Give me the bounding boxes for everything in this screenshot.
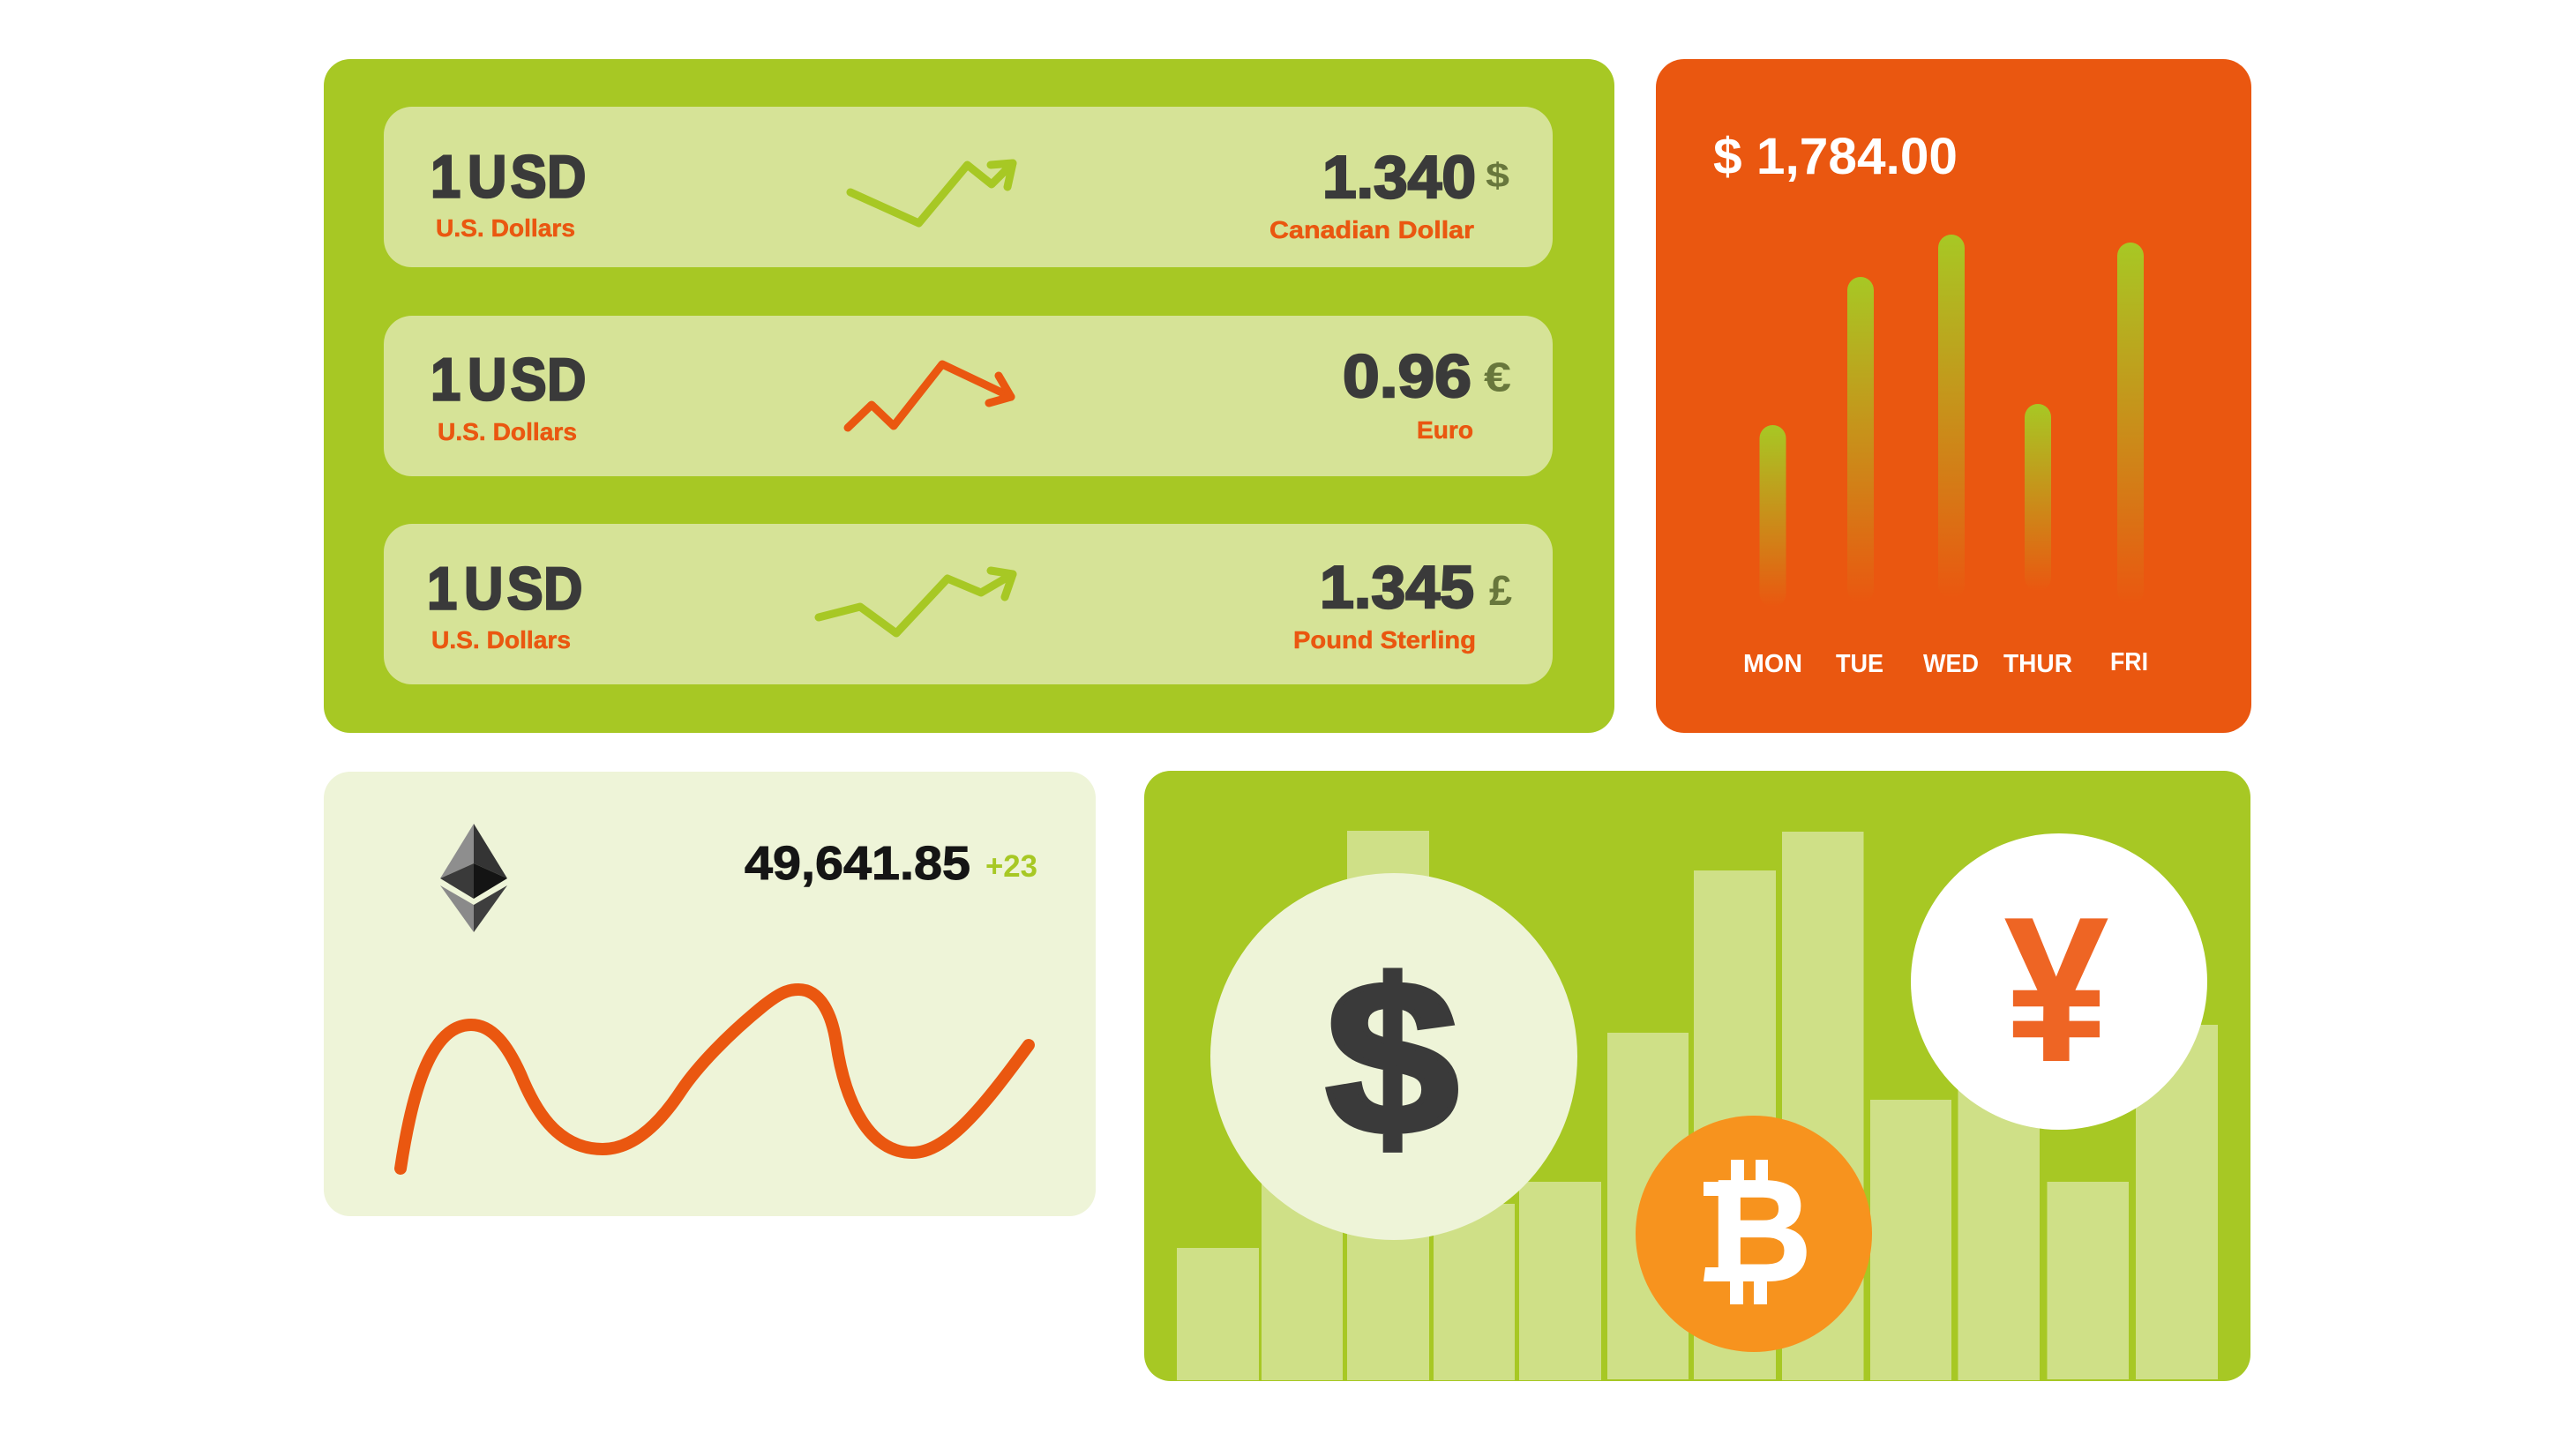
price change: +23 <box>985 849 1037 884</box>
row: USD to Euro: 1 USD <box>431 345 586 413</box>
row: USD to Canadian Dollar: U.S. Dollars <box>436 214 575 242</box>
row: USD to Canadian Dollar <box>384 107 1553 267</box>
icon: rising trend arrow <box>850 163 1013 223</box>
panel: exchange rates <box>324 59 1614 733</box>
row: USD to Euro: U.S. Dollars <box>438 418 577 445</box>
bar chart: weekdays <box>1759 235 2144 607</box>
axis labels: weekdays <box>1743 648 2148 678</box>
icon: dollar coin <box>1210 873 1577 1240</box>
row: USD to Euro <box>384 316 1553 476</box>
row: USD to Euro: 0.96 <box>1343 342 1471 410</box>
icon: falling trend arrow <box>848 364 1011 428</box>
icon: yen coin <box>1911 833 2207 1130</box>
row: USD to Pound Sterling: U.S. Dollars <box>431 626 571 654</box>
icon: bitcoin coin: B <box>1710 1150 1812 1311</box>
row: USD to Pound Sterling: £ <box>1489 568 1512 615</box>
background bar chart <box>1177 831 2218 1380</box>
panel: currencies <box>1144 771 2250 1381</box>
axis labels: weekdays: FRI <box>2110 648 2148 676</box>
row: USD to Euro: € <box>1484 355 1511 400</box>
row: USD to Pound Sterling: 1 USD <box>427 554 582 622</box>
axis labels: weekdays: WED <box>1923 650 1979 678</box>
heading: total amount: $ 1,784.00 <box>1713 128 1958 185</box>
icon: ethereum logo <box>440 824 507 932</box>
panel: ethereum price <box>324 772 1096 1216</box>
icon: yen coin: ¥ <box>2005 876 2108 1104</box>
row: USD to Pound Sterling: 1.345 <box>1320 554 1474 621</box>
row: USD to Canadian Dollar: 1 USD <box>431 142 586 210</box>
row: USD to Pound Sterling <box>384 524 1553 684</box>
row: USD to Canadian Dollar: $ <box>1486 157 1509 195</box>
axis labels: weekdays: TUE <box>1836 650 1883 678</box>
icon: rising trend arrow <box>819 571 1013 633</box>
price value: 49,641.85 <box>745 837 970 890</box>
row: USD to Canadian Dollar: Canadian Dollar <box>1269 216 1474 243</box>
panel: weekly bar chart <box>1656 59 2251 733</box>
axis labels: weekdays: MON <box>1743 650 1802 678</box>
row: USD to Euro: Euro <box>1417 416 1473 444</box>
axis labels: weekdays: THUR <box>2003 650 2072 678</box>
line chart <box>401 990 1029 1169</box>
icon: bitcoin coin <box>1636 1116 1872 1352</box>
icon: dollar coin: $ <box>1326 935 1458 1180</box>
row: USD to Pound Sterling: Pound Sterling <box>1293 626 1476 654</box>
row: USD to Canadian Dollar: 1.340 <box>1322 144 1476 211</box>
